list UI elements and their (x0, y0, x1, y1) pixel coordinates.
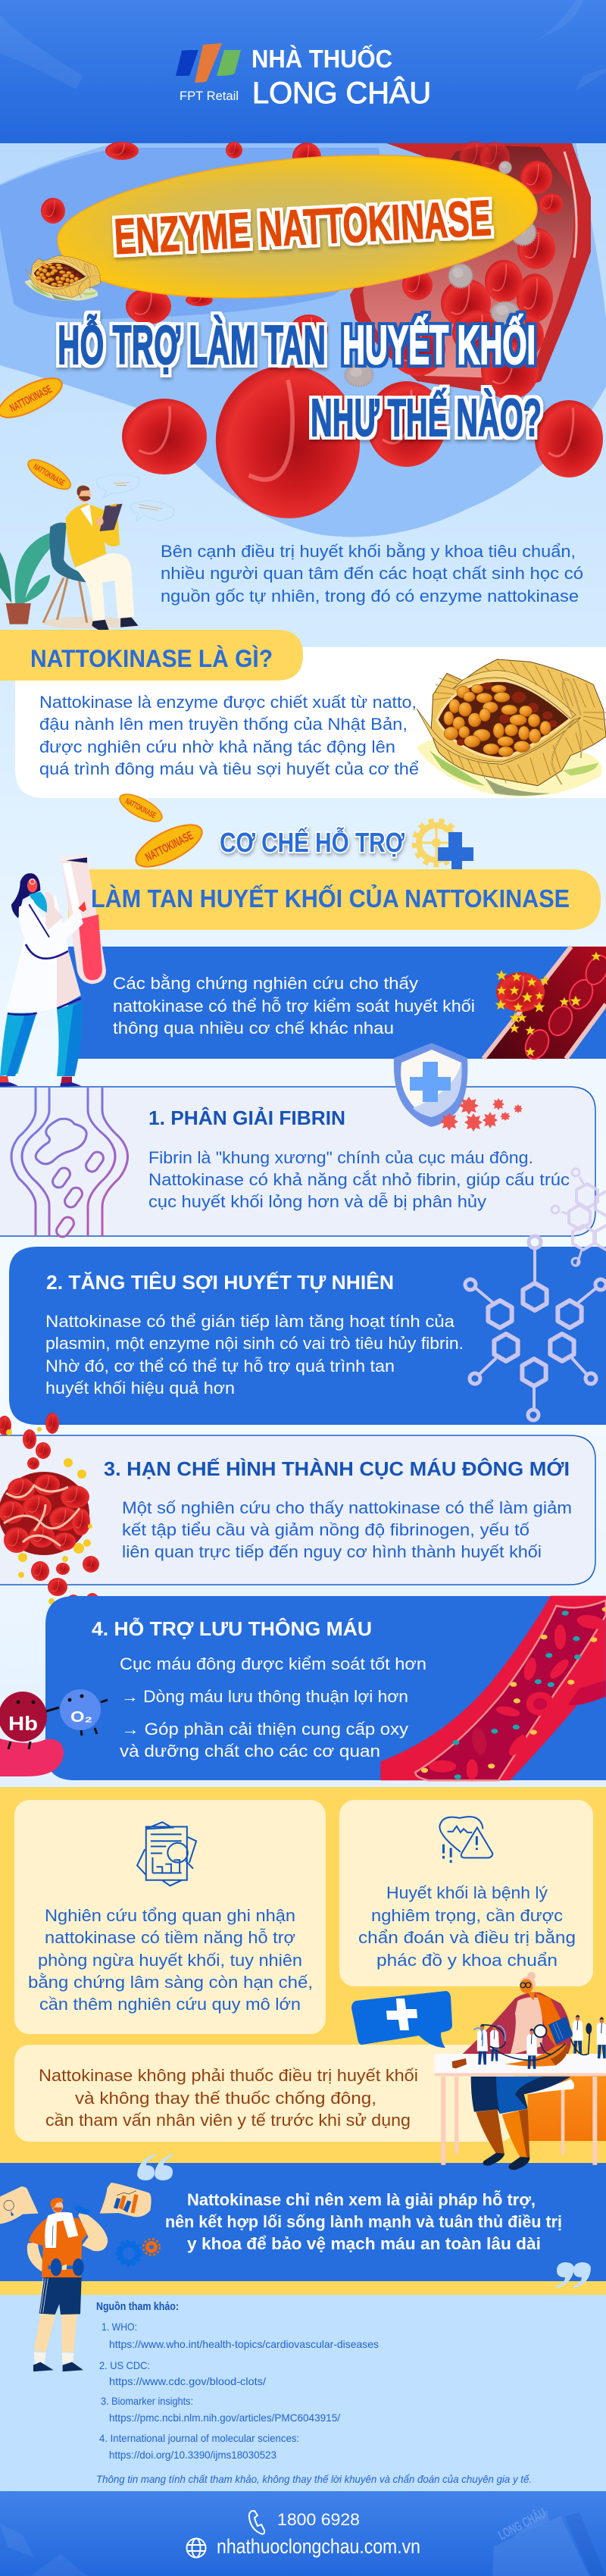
text: cần tham vấn nhân viên y tế trước khi sử dụng (45, 2111, 411, 2130)
capsule: nattokinase pill (116, 789, 166, 827)
paragraph: Nattokinase có khả năng cắt nhỏ fibrin, giúp cấu trúc (148, 1170, 570, 1189)
speech bubble: idea (0, 2186, 39, 2224)
paragraph: Một số nghiên cứu cho thấy nattokinase có thể làm giảm (122, 1498, 572, 1517)
icon: plant (0, 533, 50, 624)
panel: 4 ho tro luu thong mau (45, 1596, 606, 1780)
text: cần thêm nghiên cứu quy mô lớn (39, 1995, 301, 2014)
paragraph (120, 1654, 426, 1761)
reference list: https://www.who.int/health-topics/cardiovascular-diseases (109, 2338, 379, 2350)
illustration: woman patient with tiny doctors (434, 1972, 606, 2170)
hero: floating red blood cells (41, 142, 603, 527)
paragraph (122, 1498, 572, 1561)
text: phác đồ y khoa chuẩn (376, 1951, 558, 1970)
footer band (0, 2491, 606, 2576)
paragraph: Nhờ đó, cơ thể có thể tự hỗ trợ quá trình tan (45, 1357, 395, 1376)
icon: red virus particles (440, 1097, 523, 1131)
heading: 2. TĂNG TIÊU SỢI HUYẾT TỰ NHIÊN (46, 1271, 394, 1294)
heading: 1. PHÂN GIẢI FIBRIN (148, 1106, 345, 1129)
icon: molecule cluster (465, 1236, 606, 1420)
panel: Nattokinase la gi (0, 630, 606, 798)
heading: Nguồn tham khảo: (96, 2300, 179, 2313)
logo: FPT Retail: FPT Retail (180, 89, 239, 103)
icon: molecule faint (551, 1169, 606, 1266)
quote text: nên kết hợp lối sống lành mạnh và tuân thủ điều trị (165, 2212, 562, 2231)
intro text: nhiều người quan tâm đến các hoạt chất sinh học có (161, 564, 583, 583)
quote text: Nattokinase chỉ nên xem là giải pháp hỗ trợ, (187, 2190, 536, 2209)
icon: heart warning (439, 1817, 492, 1863)
intro text: nguồn gốc tự nhiên, trong đó có enzyme nattokinase (161, 587, 579, 606)
paragraph (45, 1312, 464, 1398)
text (113, 974, 475, 1038)
logo: FPT Retail (176, 43, 241, 103)
paragraph: plasmin, một enzyme nội sinh có vai trò tiêu hủy fibrin. (45, 1334, 464, 1353)
paragraph: huyết khối hiệu quả hơn (45, 1379, 235, 1398)
reference list: https://www.cdc.gov/blood-clots/ (109, 2375, 266, 2387)
paragraph: → Góp phần cải thiện cung cấp oxy (121, 1720, 408, 1739)
panel: 1 phan giai fibrin (0, 1043, 595, 1239)
capsule: nattokinase small (23, 454, 75, 495)
capsule: nattokinase large: NATTOKINASE (144, 829, 195, 864)
heading tab (0, 630, 303, 681)
reference list: 4. International journal of molecular sciences: (99, 2432, 299, 2444)
text: chẩn đoán và điều trị bằng (358, 1928, 576, 1947)
capsule: nattokinase pill: NATTOKINASE (123, 797, 158, 821)
card: warning note (339, 1800, 593, 1986)
image: natto basket (417, 659, 606, 797)
reference list: https://doi.org/10.3390/ijms18030523 (109, 2449, 276, 2461)
text (28, 1906, 313, 2014)
heading: co che ho tro: CƠ CHẾ HỖ TRỢ (220, 826, 405, 858)
card: caution note (14, 2045, 514, 2142)
brand name: NHÀ THUỐC (251, 44, 392, 73)
text (358, 1883, 576, 1970)
text: phòng ngừa huyết khối, tuy nhiên (38, 1951, 302, 1970)
illustration: Hb and O2 characters: Hb (8, 1712, 38, 1735)
paragraph: Cục máu đông được kiểm soát tốt hơn (120, 1654, 426, 1673)
reference list: 3. Biomarker insights: (101, 2395, 193, 2407)
panel: 3 han che hinh thanh cuc mau dong (0, 1435, 595, 1585)
reference list (99, 2321, 379, 2461)
text: Nattokinase không phải thuốc điều trị huyết khối (39, 2066, 418, 2085)
reference list: 2. US CDC: (99, 2359, 150, 2371)
capsule: nattokinase hero (0, 371, 67, 425)
watermark: pharmacy storefront: LONG CHÂU (495, 2505, 548, 2543)
text: thông qua nhiều cơ chế khác nhau (113, 1019, 394, 1038)
illustration: Hb and O2 characters: O₂ (70, 1709, 92, 1726)
heading bar: background pill (68, 869, 601, 930)
brand name (251, 44, 431, 110)
paragraph: được nghiên cứu nhờ khả năng tác động lên (39, 737, 395, 756)
text: Các bằng chứng nghiên cứu cho thấy (113, 974, 418, 993)
illustration: Hb and O2 characters (0, 1689, 108, 1776)
icon: globe (186, 2539, 206, 2557)
hero: yellow title badge (58, 155, 537, 298)
paragraph: đậu nành lên men truyền thống của Nhật Bản, (39, 715, 408, 734)
disclaimer: Thông tin mang tính chất tham khảo, không thay thế lời khuyên và chẩn đoán của chuyên gia y tế. (96, 2473, 532, 2485)
card: research note (14, 1800, 326, 2034)
speech bubble: chart (100, 2183, 152, 2217)
quote text: y khoa để bảo vệ mạch máu an toàn lâu dài (187, 2234, 541, 2253)
text: nghiêm trọng, cần được (371, 1906, 563, 1925)
icon: blue speech bubble with plus (351, 1991, 452, 2048)
icon: wrapped natto small (23, 253, 102, 303)
icon: opening quote mark (137, 2154, 173, 2180)
reference list: https://pmc.ncbi.nlm.nih.gov/articles/PMC6043915/ (109, 2412, 340, 2424)
panel: blue quote section (0, 2163, 606, 2281)
paragraph: cục huyết khối lỏng hơn và dễ bị phân hủy (148, 1192, 486, 1211)
icon: shield with plus (394, 1043, 467, 1127)
intro text: Bên cạnh điều trị huyết khối bằng y khoa tiêu chuẩn, (161, 542, 576, 561)
text: nattokinase có tiềm năng hỗ trợ (45, 1928, 295, 1947)
heading: lam tan huyet khoi: LÀM TAN HUYẾT KHỐI CỦA NATTOKINASE (91, 884, 570, 912)
capsule: nattokinase small: NATTOKINASE (32, 462, 66, 488)
strip: yellow divider (0, 2281, 606, 2295)
text: Huyết khối là bệnh lý (386, 1883, 548, 1902)
diagram: vessel with clot (11, 1087, 127, 1239)
heading tab: NATTOKINASE LÀ GÌ? (30, 645, 273, 672)
text: Nghiên cứu tổng quan ghi nhận (45, 1906, 295, 1925)
text (39, 2066, 418, 2130)
header band (0, 0, 606, 143)
icon: gear and plus (414, 821, 473, 872)
paragraph: Fibrin là "khung xương" chính của cục máu đông. (148, 1148, 533, 1167)
icon: closing quote mark (556, 2262, 591, 2289)
paragraph (39, 693, 419, 778)
brand name: LONG CHÂU (252, 76, 431, 110)
hero: blood vessel and cells (350, 141, 591, 399)
icon: report with magnifier (137, 1822, 196, 1886)
phone number: 1800 6928 (277, 2510, 360, 2529)
reference list: 1. WHO: (102, 2321, 137, 2333)
page background (0, 143, 606, 1795)
text: bằng chứng lâm sàng còn hạn chế, (28, 1973, 313, 1992)
illustration: doctor reading with plant (0, 474, 174, 631)
paragraph: Nattokinase là enzyme được chiết xuất từ natto, (39, 693, 417, 712)
heading: 3. HẠN CHẾ HÌNH THÀNH CỤC MÁU ĐÔNG MỚI (104, 1457, 570, 1480)
paragraph: kết tập tiểu cầu và giảm nồng độ fibrinogen, yếu tố (122, 1520, 529, 1539)
panel: references (0, 2295, 606, 2491)
paragraph: liên quan trực tiếp đến nguy cơ hình thành huyết khối (122, 1542, 542, 1561)
image: damaged vessel (483, 947, 606, 1063)
intro text (161, 542, 583, 606)
illustration: doctor holding test tube (0, 853, 106, 1087)
panel: yellow notes section (0, 1787, 606, 2163)
capsule: nattokinase hero: NATTOKINASE (8, 383, 54, 415)
hero title line 2: HỖ TRỢ LÀM TAN (58, 314, 326, 376)
image: blood vessel with cells (380, 1596, 606, 1780)
icon: phone (249, 2511, 264, 2534)
text: nattokinase có thể hỗ trợ kiểm soát huyết khối (113, 997, 475, 1016)
illustration: man with dumbbell (0, 2183, 160, 2371)
website: nhathuoclongchau.com.vn (217, 2535, 420, 2558)
panel: evidence intro (68, 947, 606, 1063)
watermark: pharmacy storefront (492, 2505, 606, 2576)
heading: 4. HỖ TRỢ LƯU THÔNG MÁU (92, 1617, 372, 1640)
text: và không thay thế thuốc chống đông, (75, 2089, 376, 2108)
paragraph (148, 1148, 570, 1211)
panel: 2 tang tieu soi huyet (9, 1247, 606, 1425)
illustration: blood clot cluster (0, 1413, 100, 1613)
paragraph: và dưỡng chất cho các cơ quan (120, 1742, 380, 1761)
paragraph: → Dòng máu lưu thông thuận lợi hơn (121, 1687, 408, 1706)
quote text (165, 2190, 562, 2253)
capsule: nattokinase large (130, 816, 208, 875)
paragraph: Nattokinase có thể gián tiếp làm tăng hoạt tính của (45, 1312, 455, 1331)
paragraph: quá trình đông máu và tiêu sợi huyết của cơ thể (39, 759, 419, 778)
